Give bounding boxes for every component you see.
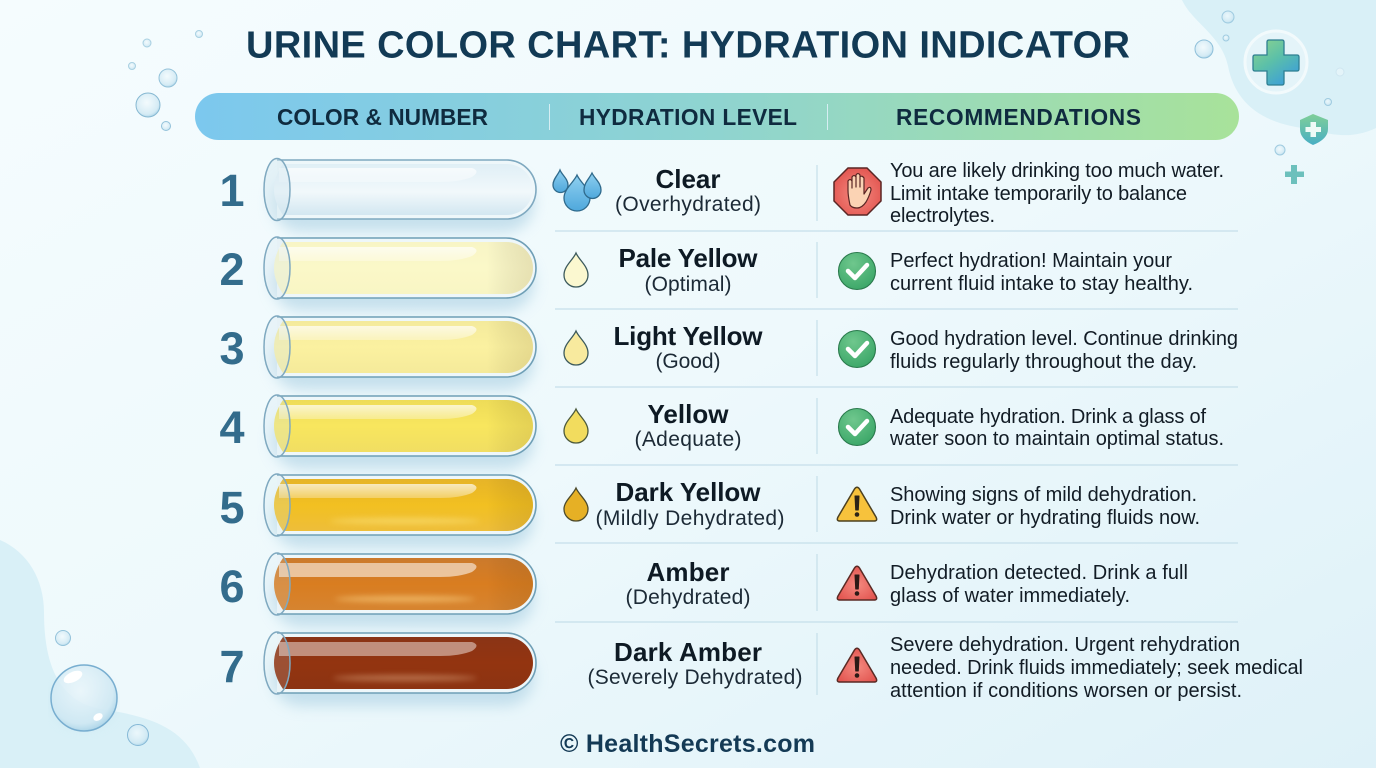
icon: stop hand	[834, 168, 881, 215]
icon: dark yellow drop	[564, 488, 588, 521]
label: dark yellow: Dark Yellow	[616, 477, 761, 507]
icon: medical cross in bubble	[1245, 31, 1307, 93]
footer credit: © HealthSecrets.com	[560, 730, 815, 758]
recommendation 6	[890, 562, 1188, 607]
label: pale yellow: Pale Yellow	[618, 243, 758, 273]
number 1: 1	[219, 165, 245, 216]
icon: shield	[1300, 114, 1328, 145]
recommendation 3	[890, 328, 1238, 373]
title: URINE COLOR CHART: HYDRATION INDICATOR	[246, 24, 1130, 66]
row 4: yellow: (Adequate)	[634, 428, 742, 451]
number 6: 6	[219, 561, 245, 612]
recommendation 4	[889, 406, 1224, 450]
heading: hydration level: HYDRATION LEVEL	[579, 104, 797, 130]
heading: recommendations: RECOMMENDATIONS	[896, 104, 1141, 130]
icon: red warning	[837, 566, 877, 600]
tube 7	[264, 632, 536, 706]
row 6: amber: (Dehydrated)	[626, 586, 750, 609]
tube 4	[264, 395, 536, 469]
recommendation 4: water soon to maintain optimal status.	[889, 428, 1224, 450]
row 2: pale yellow: (Optimal)	[644, 273, 732, 296]
recommendation 6: Dehydration detected. Drink a full	[890, 562, 1188, 584]
number 2: 2	[219, 244, 245, 295]
recommendation 2: Perfect hydration! Maintain your	[890, 250, 1172, 272]
tube 3	[264, 316, 536, 390]
icon: yellow drop	[564, 409, 588, 443]
recommendation 3: fluids regularly throughout the day.	[890, 351, 1197, 373]
recommendation 4: Adequate hydration. Drink a glass of	[890, 406, 1206, 428]
icon: red warning	[837, 648, 877, 682]
recommendation 5	[890, 484, 1200, 529]
label: dark amber: Dark Amber	[614, 637, 762, 667]
tube 1	[264, 158, 536, 232]
recommendation 2: current fluid intake to stay healthy.	[890, 273, 1193, 295]
icon: small plus	[1285, 165, 1304, 184]
heading: color and number: COLOR & NUMBER	[277, 104, 488, 130]
recommendation 3: Good hydration level. Continue drinking	[890, 328, 1238, 350]
number 7: 7	[219, 641, 245, 692]
recommendation 1: electrolytes.	[890, 205, 995, 227]
icon: light yellow drop	[564, 331, 588, 365]
row 7: dark amber	[219, 632, 1303, 706]
recommendation 5: Showing signs of mild dehydration.	[890, 484, 1197, 506]
label: yellow: Yellow	[648, 399, 729, 429]
row 1: clear	[219, 158, 1224, 232]
row 2: pale yellow	[219, 237, 1193, 311]
blob: bottom left	[0, 540, 200, 768]
recommendation 7: Severe dehydration. Urgent rehydration	[890, 634, 1240, 656]
tube 2	[264, 237, 536, 311]
recommendation 7: attention if conditions worsen or persist.	[890, 680, 1242, 702]
number 3: 3	[219, 323, 245, 374]
icon: yellow warning	[837, 487, 877, 521]
row 5: dark yellow: (Mildly Dehydrated)	[596, 507, 784, 530]
icon: water drops	[553, 170, 601, 211]
row 4: yellow	[219, 395, 1224, 469]
label: amber: Amber	[646, 557, 730, 587]
icon: check	[838, 252, 876, 290]
label: clear: Clear	[655, 164, 721, 194]
row 3: light yellow	[219, 316, 1238, 390]
row 5: dark yellow	[219, 474, 1200, 548]
table header bar	[195, 93, 1239, 140]
number 4: 4	[219, 402, 245, 453]
icon: check	[838, 330, 876, 368]
recommendation 5: Drink water or hydrating fluids now.	[890, 507, 1200, 529]
tube 6	[264, 553, 536, 627]
icon: pale drop	[564, 253, 588, 287]
number 5: 5	[219, 482, 245, 533]
row 1: clear: (Overhydrated)	[615, 193, 761, 216]
recommendation 1: Limit intake temporarily to balance	[890, 183, 1187, 205]
blob: top right	[1182, 0, 1376, 135]
row 6: amber	[219, 553, 1188, 627]
row 3: light yellow: (Good)	[656, 350, 720, 373]
recommendation 7	[890, 634, 1303, 702]
bubbles: bottom left	[51, 630, 148, 746]
recommendation 7: needed. Drink fluids immediately; seek medical	[890, 657, 1303, 679]
recommendation 1: You are likely drinking too much water.	[890, 160, 1224, 182]
label: light yellow: Light Yellow	[614, 321, 763, 351]
icon: check	[838, 408, 876, 446]
bubbles and medical icons: top right	[1195, 11, 1344, 184]
recommendation 1	[890, 160, 1224, 227]
tube 5	[264, 474, 536, 548]
bubbles: top left	[128, 30, 202, 130]
row 7: dark amber: (Severely Dehydrated)	[588, 666, 802, 689]
recommendation 6: glass of water immediately.	[890, 585, 1130, 607]
recommendation 2	[890, 250, 1193, 295]
